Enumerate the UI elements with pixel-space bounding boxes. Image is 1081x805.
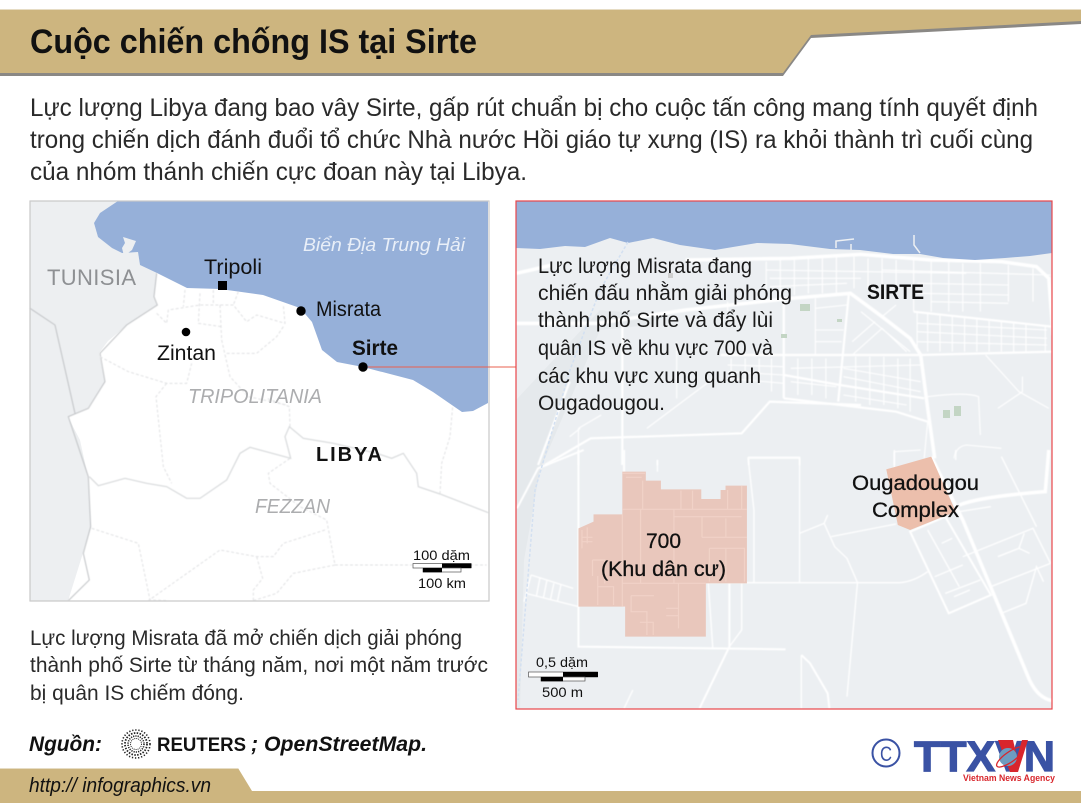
city: Tripoli: Tripoli (204, 256, 262, 279)
borders (30, 273, 488, 601)
zone: Ougadougou Complex (886, 457, 956, 530)
callout text (538, 255, 792, 415)
label: Tunisia: TUNISIA (47, 265, 136, 290)
callout text: các khu vực xung quanh (538, 365, 761, 388)
callout text: Ougadougou. (538, 392, 665, 415)
map frame (516, 201, 1052, 709)
website: http:// infographics.vn (29, 775, 211, 797)
logo: TTXVN: Vietnam News Agency (963, 773, 1056, 784)
footer band (0, 768, 1081, 803)
intro text: Lực lượng Libya đang bao vây Sirte, gấp rút chuẩn bị cho cuộc tấn công mang tính quyết định (30, 94, 1038, 122)
wadi dashed line (518, 242, 628, 700)
city: Sirte (352, 337, 398, 372)
source line (29, 730, 427, 758)
title: Cuộc chiến chống IS tại Sirte (30, 23, 477, 61)
scale bar: city: 500 m (542, 684, 583, 700)
text block: offensive summary: thành phố Sirte từ tháng năm, nơi một năm trước (30, 654, 488, 677)
scale bar: overview: 100 dặm (413, 547, 470, 563)
sea (94, 201, 488, 412)
label: 700 (601, 530, 726, 581)
green parks (781, 304, 961, 418)
panel: Sirte city map (516, 201, 1053, 709)
scale bar: city: 0,5 dặm (536, 654, 588, 670)
city: Misrata: Misrata (316, 298, 381, 321)
map frame (30, 201, 489, 601)
label: Libya: LIBYA (316, 444, 382, 466)
callout text: thành phố Sirte và đẩy lùi (538, 309, 773, 332)
city: Sirte: Sirte (352, 337, 398, 360)
source line: ; OpenStreetMap. (251, 733, 427, 756)
intro text: trong chiến dịch đánh đuổi tổ chức Nhà nước Hồi giáo tự xưng (IS) ra khỏi thành trì cuối cùng (30, 126, 1033, 154)
source line: Nguồn: (29, 733, 102, 756)
source line: REUTERS (157, 735, 246, 756)
icon: copyright: C (880, 743, 892, 766)
city: Tripoli (204, 256, 262, 290)
intro text (30, 94, 1038, 186)
callout text: quân IS về khu vực 700 và (538, 337, 773, 360)
callout text: Lực lượng Misrata đang (538, 255, 752, 278)
label: 700: 700 (646, 530, 681, 553)
connector line (368, 366, 516, 368)
city roads (516, 254, 1053, 465)
intro text: của nhóm thánh chiến cực đoan này tại Libya. (30, 158, 527, 186)
text block: offensive summary (30, 627, 488, 705)
label: Ougadougou Complex: Ougadougou (852, 472, 979, 495)
icon: copyright (872, 740, 900, 766)
label: Tripolitania: TRIPOLITANIA (188, 386, 322, 408)
harbour piers (836, 235, 920, 253)
zone: 700 residential area (578, 472, 747, 637)
city: Zintan (157, 328, 216, 365)
scale bar: overview (413, 547, 472, 591)
city: Zintan: Zintan (157, 342, 216, 365)
sea (516, 201, 1052, 260)
label: Ougadougou Complex (852, 472, 979, 522)
scale bar: city (528, 654, 598, 700)
label: sea name: Biển Địa Trung Hải (303, 235, 466, 255)
label: SIRTE: SIRTE (867, 281, 924, 304)
logo: TTXVN: TTXVN (914, 733, 1055, 781)
panel: Libya overview map (30, 201, 489, 601)
callout text: chiến đấu nhằm giải phóng (538, 282, 792, 305)
icon: Reuters dotted globe (122, 730, 150, 758)
header banner (0, 9, 1081, 76)
neighbouring land: Tunisia and Algeria (30, 201, 157, 601)
southern roads (517, 450, 1052, 708)
label: Ougadougou Complex: Complex (872, 499, 960, 522)
label: 700: (Khu dân cư) (601, 558, 726, 581)
scale bar: overview: 100 km (418, 575, 466, 591)
island (122, 237, 136, 256)
wadi shading (516, 310, 660, 709)
text block: offensive summary: bị quân IS chiếm đóng. (30, 682, 244, 705)
label: Fezzan: FEZZAN (255, 496, 331, 518)
text block: offensive summary: Lực lượng Misrata đã mở chiến dịch giải phóng (30, 627, 462, 650)
